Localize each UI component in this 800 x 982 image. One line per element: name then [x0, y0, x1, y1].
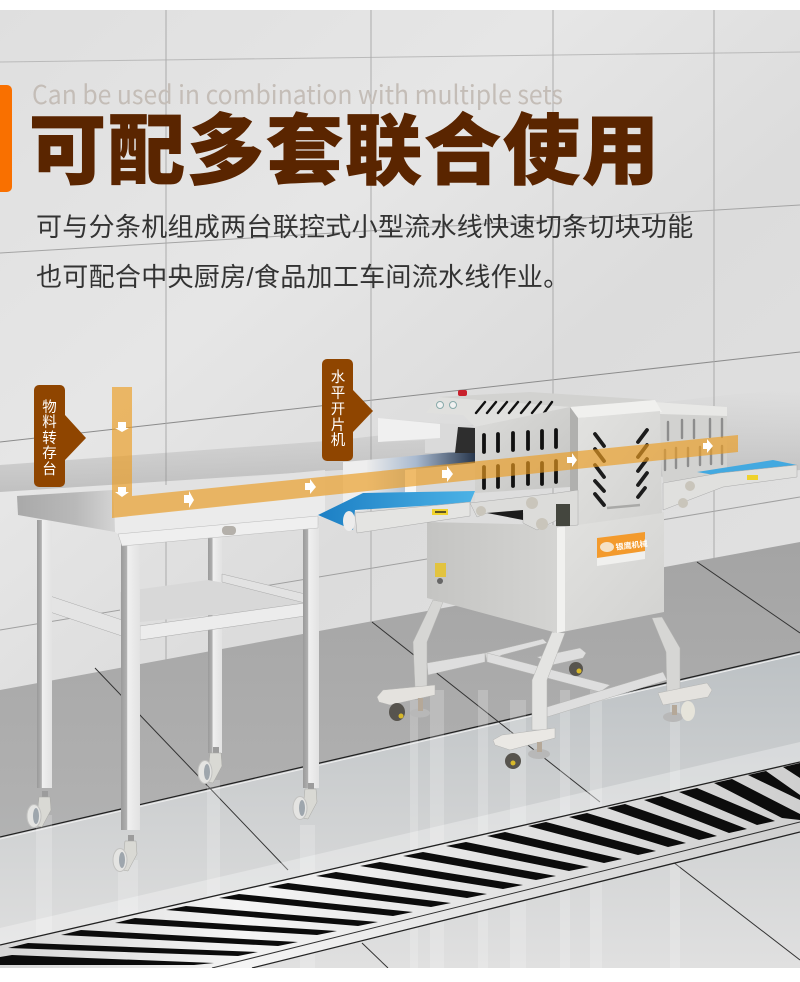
- middle slotted cover: [475, 407, 570, 493]
- flow direction arrows: [115, 422, 713, 508]
- callout: transfer table label: 存: [42, 445, 57, 462]
- callout: transfer table label: 物: [42, 399, 57, 416]
- callout: horizontal slicer label: 水: [331, 369, 346, 386]
- brand plate: 银鹰机械: [615, 538, 648, 552]
- callout: horizontal slicer label: 平: [331, 386, 345, 402]
- floor drain grate: [0, 742, 800, 968]
- callout: transfer table label: [34, 385, 86, 487]
- table legs: [37, 520, 319, 830]
- description text: [36, 212, 694, 292]
- callout: transfer table label: 台: [42, 461, 57, 478]
- material transfer table: [17, 470, 325, 872]
- description text: 可与分条机组成两台联控式小型流水线快速切条切块功能: [36, 212, 694, 242]
- table top: [17, 470, 325, 546]
- slicing machine: [318, 390, 797, 769]
- callout: horizontal slicer label: 机: [331, 432, 346, 449]
- machine cabinet: [427, 512, 664, 633]
- machine feet and casters: [389, 662, 695, 769]
- english subtitle: Can be used in combination with multiple sets: [32, 75, 563, 112]
- warning label: [435, 563, 446, 577]
- infeed conveyor belt: [318, 490, 578, 533]
- table back leg: [208, 535, 222, 753]
- table lower shelf: [38, 574, 305, 640]
- top control panel: [426, 390, 655, 427]
- bottom white margin: [0, 968, 800, 982]
- callout: transfer table label: 料: [42, 414, 57, 431]
- process flow band: [112, 387, 738, 518]
- infeed hood: [343, 418, 475, 512]
- floor reflections: [36, 690, 680, 968]
- callout: horizontal slicer label: 片: [331, 417, 345, 434]
- table casters: [27, 791, 51, 828]
- callout: horizontal slicer label: 开: [331, 402, 345, 418]
- front slotted cover: [570, 400, 662, 525]
- callout: horizontal slicer label: [322, 359, 373, 461]
- orange accent tab: [0, 85, 12, 192]
- description text: 也可配合中央厨房/食品加工车间流水线作业。: [36, 262, 570, 292]
- brand plate: [597, 532, 648, 566]
- rear section and outfeed: [655, 402, 797, 510]
- machine stand frame: [377, 600, 712, 750]
- emergency stop button: [458, 390, 467, 396]
- main title: 可配多套联合使用: [29, 109, 661, 195]
- background: tiled floor: [0, 542, 800, 968]
- callout: transfer table label: 转: [42, 430, 57, 447]
